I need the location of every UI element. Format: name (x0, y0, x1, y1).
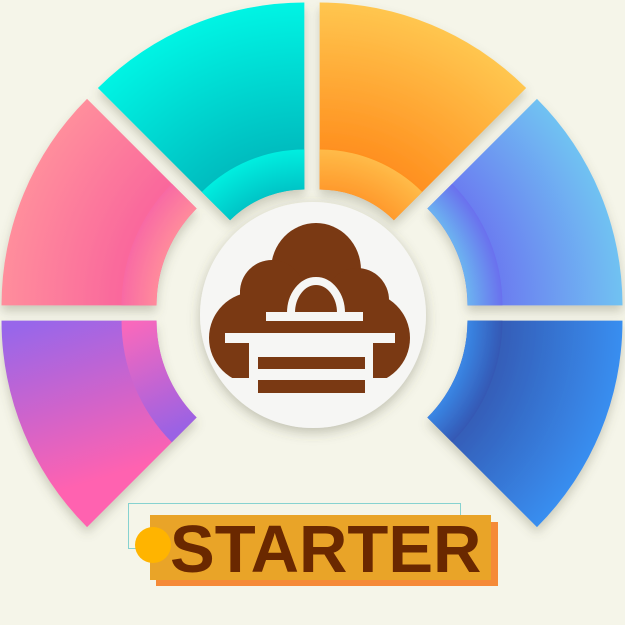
segment: blue (427, 321, 622, 527)
segment: pink (2, 99, 197, 305)
icon: cloud printer (209, 223, 410, 398)
label: STARTER: STARTER (170, 512, 481, 587)
center circle (200, 202, 426, 428)
segment: orange (320, 3, 526, 220)
segment: blue-violet (399, 99, 625, 383)
segment: teal (98, 0, 398, 242)
segment: pink-purple (0, 243, 225, 527)
